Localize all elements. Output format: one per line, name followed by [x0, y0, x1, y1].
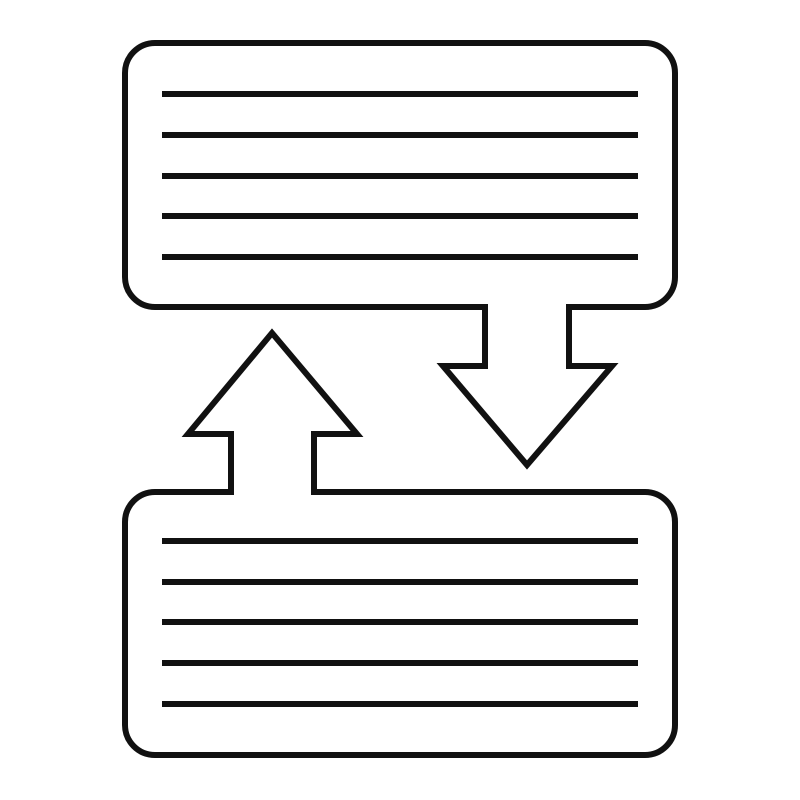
panel: bottom box with up arrow [125, 333, 675, 755]
panel: top box with down arrow [125, 43, 675, 465]
